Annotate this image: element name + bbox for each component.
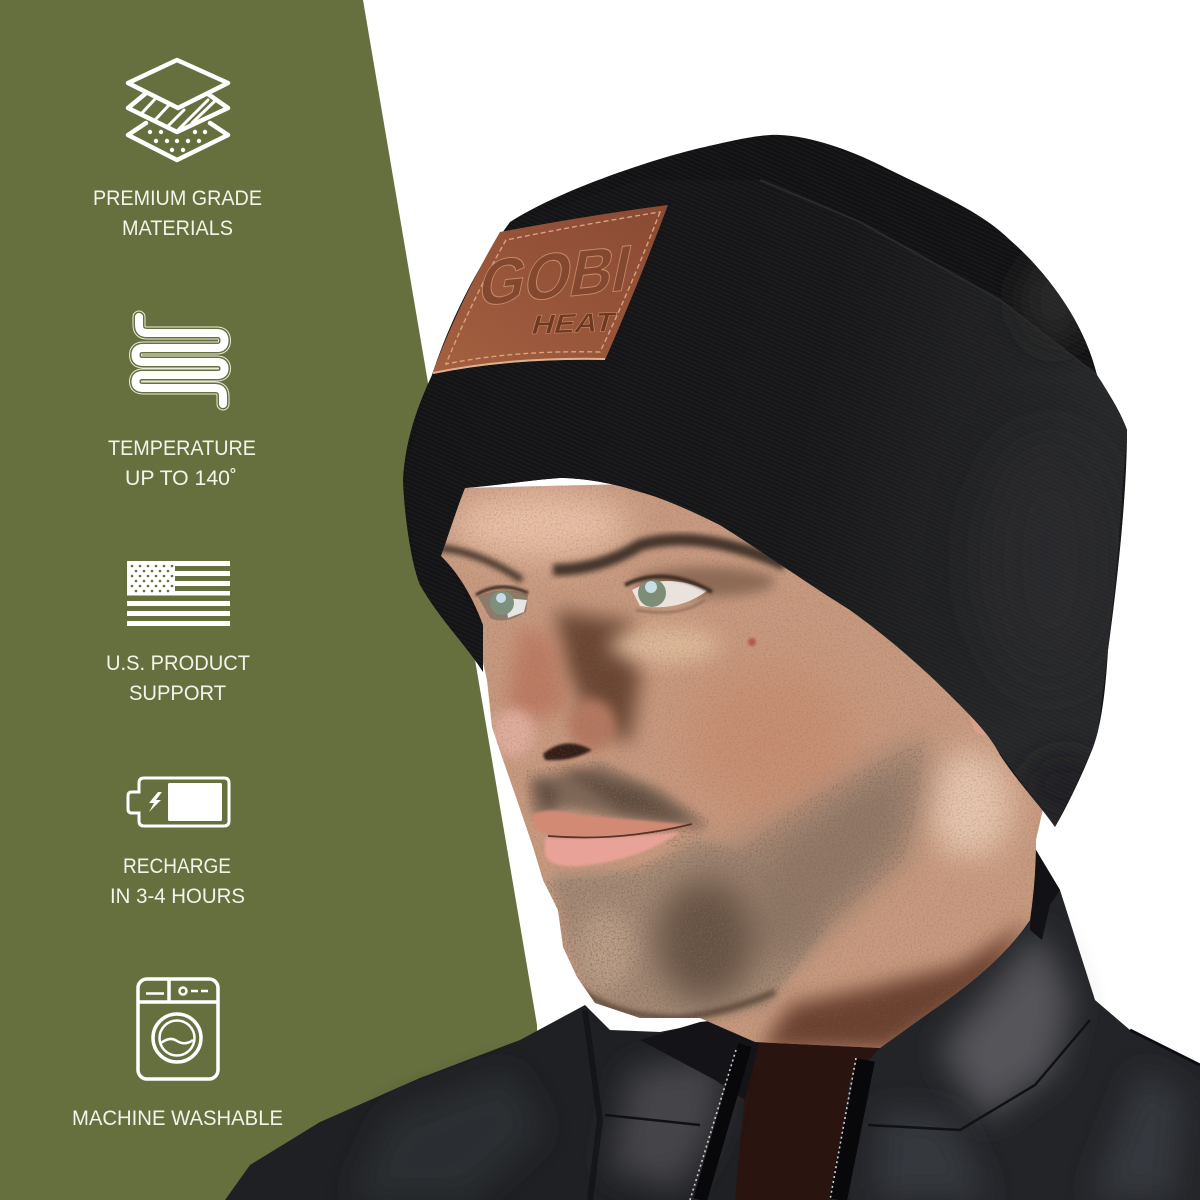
label: us product support: SUPPORT xyxy=(129,681,226,705)
feature: premium grade materials xyxy=(93,60,262,240)
under eye highlight xyxy=(610,627,720,663)
skin blemish xyxy=(748,638,756,646)
zipper: right teeth xyxy=(830,1058,856,1200)
stubble side band xyxy=(764,783,904,956)
label: recharge: RECHARGE xyxy=(123,854,231,878)
face and neck skin xyxy=(441,484,1043,1048)
right eyebrow xyxy=(553,540,785,570)
icon: charging battery xyxy=(128,778,229,826)
forehead highlight xyxy=(450,491,630,559)
moustache base xyxy=(530,765,710,828)
left eyebrow xyxy=(440,548,522,580)
jacket xyxy=(225,845,1200,1200)
icon: american flag xyxy=(127,561,230,626)
mouth line xyxy=(548,824,692,838)
feature: machine washable xyxy=(72,979,283,1130)
ear xyxy=(968,712,1000,736)
label: premium grade materials xyxy=(93,186,262,240)
icon: heating coil xyxy=(136,317,224,404)
upper lip xyxy=(532,810,690,838)
neck shadow xyxy=(760,920,1030,1050)
label: temperature: UP TO 140˚ xyxy=(125,466,237,490)
nostril xyxy=(543,743,592,760)
chin stubble base xyxy=(550,840,827,1020)
panel: green feature sidebar xyxy=(0,0,537,1200)
logo: HEAT: HEAT xyxy=(528,307,619,340)
label: us product support xyxy=(106,651,250,705)
beanie crown xyxy=(400,130,1140,830)
stubble grain xyxy=(525,742,924,1012)
logo: GOBI: GOBI xyxy=(473,231,638,320)
icon: stacked material layers xyxy=(128,60,228,160)
zipper: right xyxy=(838,1060,866,1200)
beanie xyxy=(400,130,1140,830)
feature: recharge xyxy=(110,778,245,908)
zipper: left teeth xyxy=(690,1050,736,1200)
collar: left black top xyxy=(640,1018,760,1100)
icon: washing machine xyxy=(138,979,218,1079)
jaw highlight xyxy=(928,750,1012,860)
nostril wing xyxy=(568,699,616,751)
label: us product support: U.S. PRODUCT xyxy=(106,651,250,675)
lower lip xyxy=(545,832,680,866)
moustache dark accent xyxy=(535,768,690,822)
skin grain xyxy=(442,484,1042,1042)
label: premium grade materials: PREMIUM GRADE xyxy=(93,186,262,210)
feature: us product support xyxy=(106,561,250,705)
zipper: left xyxy=(700,1045,745,1200)
neck tone xyxy=(990,903,1032,966)
label: recharge xyxy=(110,854,245,908)
label: recharge: IN 3-4 HOURS xyxy=(110,884,245,908)
left eye xyxy=(476,587,528,620)
nose tip xyxy=(491,709,535,757)
jaw underline xyxy=(575,985,775,1018)
chin tan patch xyxy=(577,910,633,990)
label: machine washable: MACHINE WASHABLE xyxy=(72,1106,283,1130)
patch stitching xyxy=(446,212,660,364)
label: premium grade materials: MATERIALS xyxy=(122,216,233,240)
feature: temperature xyxy=(108,317,256,490)
leather patch xyxy=(432,205,668,374)
nose side shadow xyxy=(555,610,640,745)
patch bottom edge highlight xyxy=(433,359,605,373)
right eye xyxy=(625,576,712,612)
photo: man wearing heated beanie xyxy=(225,130,1200,1200)
label: temperature xyxy=(108,436,256,490)
beanie cuff xyxy=(403,180,1127,827)
side stubble base xyxy=(700,735,930,960)
label: temperature: TEMPERATURE xyxy=(108,436,256,460)
stubble dark centre xyxy=(655,878,755,1002)
cheek warm tone xyxy=(692,670,848,809)
eye socket shade xyxy=(635,567,775,597)
nose bridge xyxy=(508,625,570,725)
